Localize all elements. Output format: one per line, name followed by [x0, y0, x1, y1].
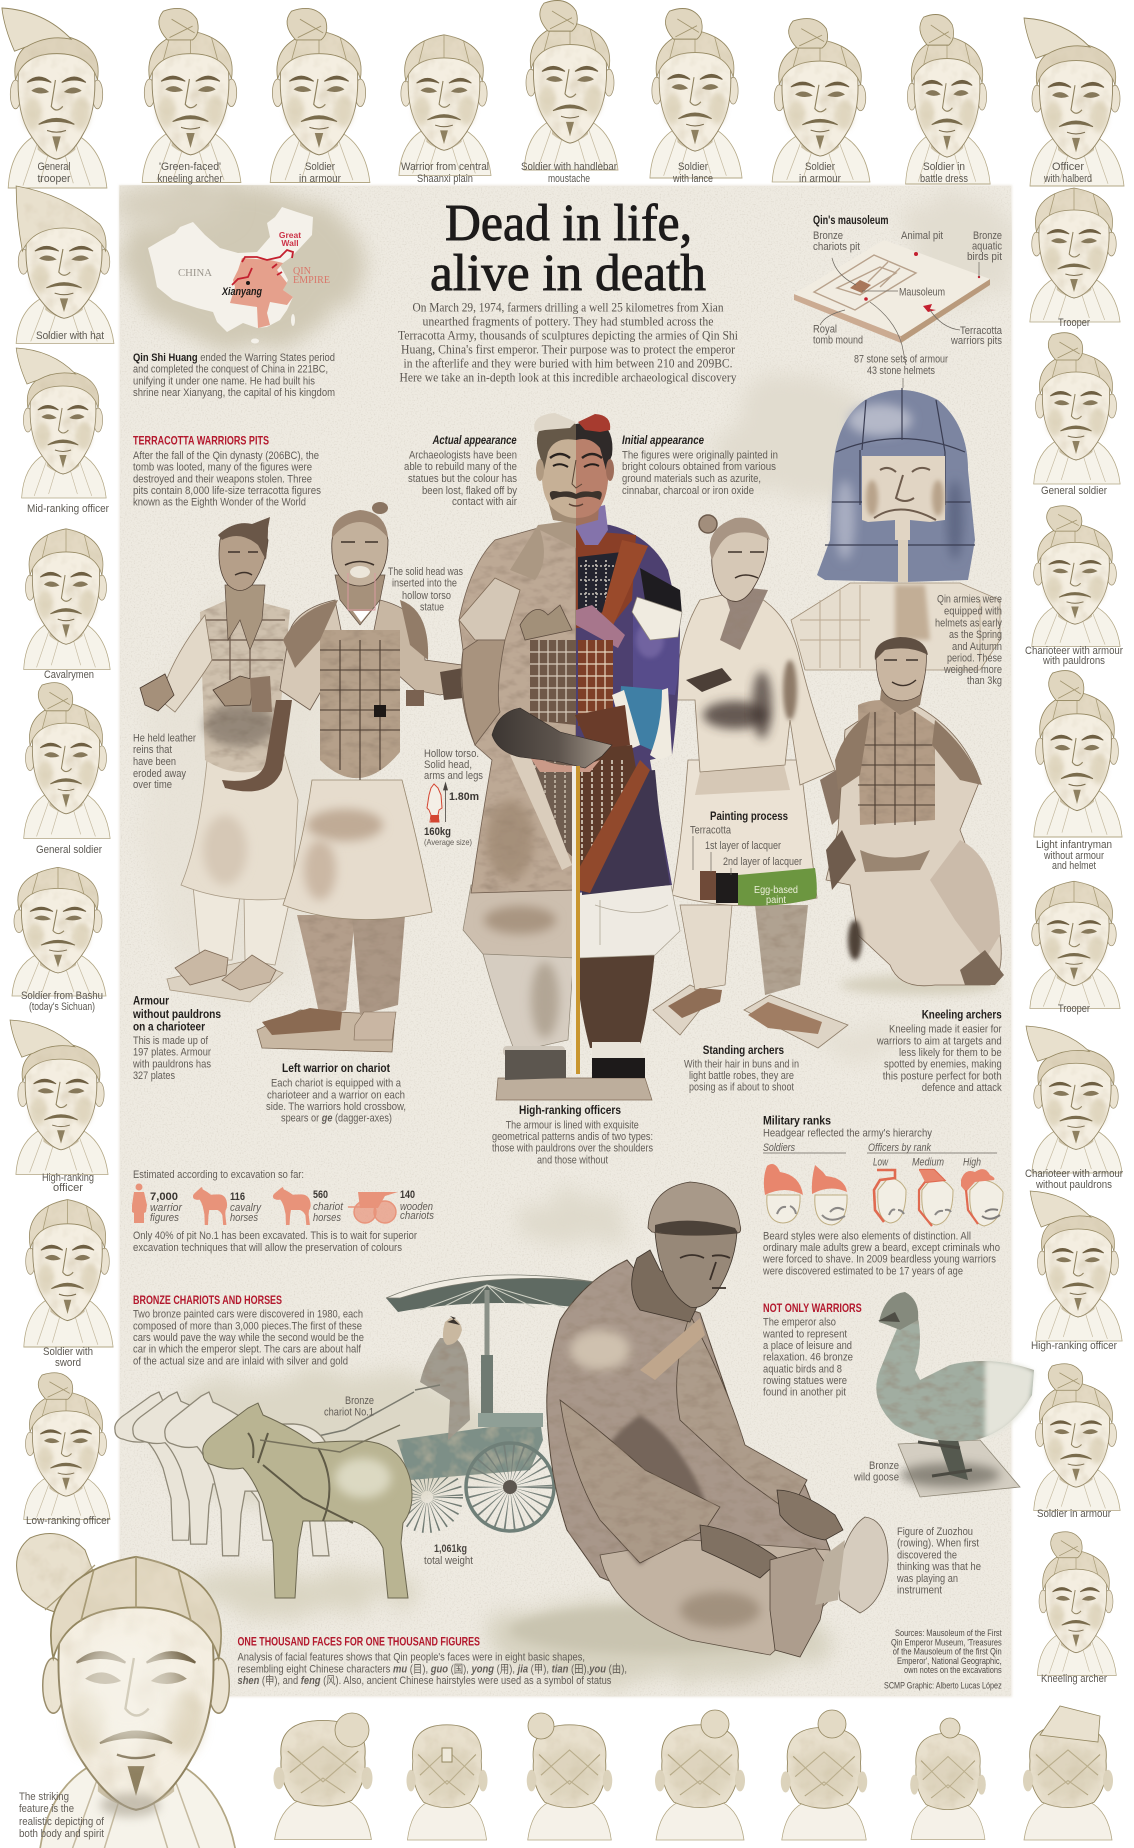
label: leather reins: [133, 732, 196, 791]
label: Qin armies helmets: weighed more: [943, 664, 1002, 676]
label: hollow torso with height icon: (Average size): [424, 837, 472, 847]
icon: soldier headgear 1: [764, 1164, 803, 1223]
icon: head General trooper: General: [38, 161, 70, 173]
title: Dead in life,: [445, 195, 692, 252]
intro paragraph: Here we take an in-depth look at this incredible archaeological discovery: [400, 370, 737, 385]
text: left warrior on chariot: Each chariot is equipped with a: [271, 1078, 402, 1090]
intro paragraph: [398, 299, 738, 385]
icon: head Soldier in battle dress: [906, 15, 990, 185]
chart: excavation estimates: [132, 1169, 434, 1254]
intro paragraph: Huang, China's first emperor. Their purpose was to protect the emperor: [401, 341, 736, 356]
label: figure of Zuozhou: thinking was that he: [897, 1561, 981, 1573]
text: kneeling archers: this posture perfect for both: [883, 1070, 1002, 1082]
text: standing archers: With their hair in buns and in: [684, 1058, 799, 1070]
painting process swatches: [700, 868, 817, 906]
text: sources and credit: of the Mausoleum of the first Qin: [893, 1646, 1002, 1656]
text: kneeling archers: spotted by enemies, making: [884, 1059, 1002, 1071]
icon: head Charioteer with armour with pauldrons: [1025, 506, 1123, 667]
text: one thousand faces: ONE THOUSAND FACES FOR ONE THOUSAND FIGURES: [238, 1637, 480, 1649]
icon: head Soldier with sword: sword: [55, 1357, 81, 1369]
chart: excavation estimates: Only 40% of pit No.1 has been excavated. This is to wait for superior: [133, 1230, 417, 1242]
icon: officer headgear high: [961, 1169, 1003, 1226]
icon: head Soldier in battle dress: battle dress: [920, 173, 968, 185]
panel: military ranks: [762, 1115, 1003, 1277]
diagram: Qin's mausoleum: aquatic: [972, 241, 1002, 253]
label: Qin armies helmets: equipped with: [944, 606, 1002, 618]
label: total weight: total weight: [424, 1555, 473, 1567]
icon: head Soldier in armour: in armour: [299, 173, 341, 185]
icon: head Charioteer with armour without pauldrons: without pauldrons: [1035, 1179, 1112, 1191]
text: high-ranking officers: [492, 1105, 653, 1166]
text: sources and credit: [884, 1628, 1002, 1690]
icon: head Green-faced kneeling archer: 'Green-faced': [159, 161, 221, 173]
map of China and Qin empire: Xianyang: [221, 286, 262, 298]
caption: striking feature: [19, 1791, 105, 1840]
text: not only warriors: a place of leisure and: [763, 1340, 852, 1352]
icon: head Green-faced kneeling archer: [142, 8, 241, 185]
icon: head Trooper: Trooper: [1058, 317, 1090, 329]
diagram: Qin's mausoleum: tomb mound: [813, 334, 863, 346]
icon: head High-ranking officer: [10, 1020, 108, 1194]
painting process labels: Terracotta: [690, 824, 732, 836]
main horse: [203, 1403, 412, 1598]
icon: head Officer with halberd: Officer: [1052, 161, 1084, 173]
figure: central high-ranking officer half restored: [459, 413, 682, 1100]
icons: rear heads showing hairstyles: [274, 1706, 1113, 1840]
map of China and Qin empire: [148, 207, 330, 344]
icon: head High-ranking officer right: High-ranking officer: [1031, 1340, 1117, 1352]
text: one thousand faces: shen (申), and feng (风). Also, ancient Chinese hairstyles were used as a symbol of status: [238, 1674, 612, 1687]
text: armour without pauldrons: 327 plates: [133, 1070, 175, 1082]
label: leather reins: reins that: [133, 744, 172, 756]
icon: head Soldier in armour 2: [772, 19, 870, 185]
icon: head Low-ranking officer: Low-ranking officer: [26, 1515, 110, 1527]
chart: excavation estimates: excavation techniques that will allow the preservation of colours: [133, 1242, 402, 1254]
label: stone sets: [854, 354, 948, 377]
label: actual appearance: able to rebuild many of the: [404, 461, 517, 473]
icon: head Soldier with handlebar moustache: Soldier with handlebar: [521, 161, 617, 173]
label: leather reins: have been: [133, 756, 176, 768]
text: armour without pauldrons: [132, 996, 221, 1082]
chart: excavation estimates: 116: [230, 1191, 245, 1203]
label: actual appearance: Actual appearance: [432, 435, 517, 447]
text: terracotta warriors pits: After the fall of the Qin dynasty (206BC), the: [133, 450, 319, 462]
text: terracotta warriors pits: TERRACOTTA WARRIORS PITS: [133, 436, 269, 448]
icon: head Soldier from Bashu: (today's Sichuan): [29, 1001, 95, 1013]
icon: cavalry horse: [193, 1187, 227, 1225]
text: not only warriors: The emperor also: [763, 1317, 836, 1329]
icon: head Kneeling archer: Kneeling archer: [1041, 1673, 1107, 1685]
map of China and Qin empire: Great: [279, 230, 301, 240]
text: kneeling archers: defence and attack: [922, 1082, 1002, 1094]
icon: head Charioteer with armour without pauldrons: [1025, 1026, 1123, 1191]
label: solid head: The solid head was: [388, 566, 463, 578]
diagram: Qin's mausoleum: Terracotta: [960, 325, 1003, 337]
icon: head Soldier in battle dress: Soldier in: [923, 161, 965, 173]
intro paragraph: On March 29, 1974, farmers drilling a well 25 kilometres from Xian: [412, 299, 724, 314]
icon: head General soldier: General soldier: [36, 844, 102, 856]
icon: head General soldier right: [1034, 333, 1120, 497]
diagram: Qin's mausoleum: chariots pit: [813, 241, 860, 253]
label: Qin armies helmets: [935, 594, 1002, 687]
icon: head Warrior from central Shaanxi plain: Warrior from central: [401, 161, 489, 173]
label: Qin armies helmets: period. These: [947, 653, 1002, 665]
icon: officer headgear low: [874, 1170, 906, 1223]
icon: head Officer with halberd: [1024, 18, 1124, 186]
text: Qin Shi Huang intro: unifying it under one name. He had built his: [133, 375, 315, 387]
text: terracotta warriors pits: known as the Eighth Wonder of the World: [133, 497, 306, 509]
figure: bronze chariot with canopy and horses: [115, 1275, 600, 1598]
caption: striking feature: feature is the: [19, 1803, 74, 1815]
icon: head High-ranking officer: officer: [53, 1182, 83, 1194]
chart: excavation estimates: figures: [150, 1212, 179, 1224]
label: leather reins: He held leather: [133, 732, 196, 744]
panel: military ranks: Officers by rank: [868, 1142, 931, 1154]
text: sources and credit: own notes on the excavations: [904, 1665, 1002, 1675]
text: terracotta warriors pits: [133, 436, 321, 509]
panel: military ranks: Low: [873, 1157, 889, 1169]
label: Qin armies helmets: helmets as early: [935, 617, 1002, 629]
icon: head Warrior from central Shaanxi plain: Shaanxi plain: [417, 173, 473, 185]
figure: Zuozhou rowing statue: [510, 1182, 981, 1657]
intro paragraph: Terracotta Army, thousands of sculptures depicting the armies of Qin Shi: [398, 327, 738, 342]
label: initial appearance: Initial appearance: [622, 435, 705, 447]
text: armour without pauldrons: with pauldrons has: [132, 1058, 211, 1070]
icon: head Light infantryman: [1034, 671, 1122, 872]
text: high-ranking officers: High-ranking officers: [519, 1105, 621, 1117]
label: total weight: 1,061kg: [434, 1543, 467, 1555]
icon: officer headgear medium: [919, 1170, 953, 1226]
text: bronze chariots and horses: composed of more than 3,000 pieces.The first of these: [133, 1320, 362, 1332]
diagram: Qin's mausoleum: Royal: [813, 324, 837, 336]
label: solid head: statue: [420, 602, 444, 614]
icon: head Mid-ranking officer: Mid-ranking officer: [27, 503, 109, 515]
label: total weight: [424, 1543, 473, 1567]
text: standing archers: light battle robes, they are: [689, 1070, 794, 1082]
text: sources and credit: Qin Emperor Museum, 'Treasures: [891, 1638, 1002, 1648]
icon: head Charioteer with armour with pauldrons: with pauldrons: [1042, 655, 1105, 667]
label: Qin armies helmets: Qin armies were: [937, 594, 1002, 606]
icon: head Soldier with lance: with lance: [672, 173, 713, 185]
painting process labels: [690, 811, 802, 875]
label: solid head: hollow torso: [402, 590, 451, 602]
text: armour without pauldrons: Armour: [133, 996, 169, 1008]
icon: head Trooper 2: Trooper: [1058, 1003, 1090, 1015]
figure: bronze wild goose: [853, 1292, 1034, 1497]
label: bronze wild goose: wild goose: [853, 1472, 899, 1484]
label: initial appearance: The figures were originally painted in: [622, 450, 778, 462]
icon: head High-ranking officer right: [1030, 1191, 1122, 1352]
intro paragraph: unearthed fragments of pottery. They had stumbled across the: [422, 313, 714, 328]
icon: head Cavalrymen: [24, 529, 110, 681]
icon: head Kneeling archer: [1037, 1532, 1116, 1685]
text: high-ranking officers: The armour is lined with exquisite: [506, 1119, 639, 1131]
text: standing archers: posing as if about to shoot: [689, 1082, 794, 1094]
chart: excavation estimates: chariot: [313, 1201, 344, 1213]
diagram: Qin's mausoleum: Mausoleum: [899, 287, 945, 299]
label: bronze wild goose: [853, 1460, 899, 1484]
text: kneeling archers: less likely for them to be: [899, 1047, 1002, 1059]
label: figure of Zuozhou: discovered the: [897, 1549, 957, 1561]
label: bronze chariot: Bronze: [345, 1395, 374, 1407]
label: solid head: [388, 566, 463, 614]
label: Qin armies helmets: as the Spring: [949, 629, 1002, 641]
label: actual appearance: been lost, flaked off by: [422, 485, 517, 497]
text: one thousand faces: Analysis of facial features shows that Qin people's faces were in eight basic shapes,: [238, 1652, 585, 1664]
icon: head Soldier with hat: [16, 186, 114, 344]
label: solid head: inserted into the: [392, 578, 457, 590]
text: left warrior on chariot: side. The warriors hold crossbow,: [266, 1101, 406, 1113]
text: one thousand faces: [238, 1637, 627, 1687]
text: Qin Shi Huang intro: Qin Shi Huang ended the Warring States period: [133, 352, 335, 364]
diagram: Qin's mausoleum: [794, 215, 1003, 388]
icon: head General soldier right: General soldier: [1041, 485, 1107, 497]
text: not only warriors: aquatic birds and 8: [763, 1363, 842, 1375]
chariot driver: [300, 1316, 470, 1440]
label: initial appearance: bright colours obtained from various: [622, 461, 776, 473]
label: figure of Zuozhou: was playing an: [896, 1573, 958, 1585]
figure: standing archer: [653, 515, 855, 1048]
chart: excavation estimates: chariots: [400, 1210, 434, 1222]
text: not only warriors: relaxation. 46 bronze: [763, 1352, 853, 1364]
panel: paper background: [110, 183, 1015, 1697]
panel: military ranks: Beard styles were also elements of distinction. All: [763, 1230, 971, 1242]
text: terracotta warriors pits: tomb was looted, many of the figures were: [133, 462, 312, 474]
icon: head Soldier with handlebar moustache: [521, 1, 618, 185]
text: not only warriors: found in another pit: [763, 1387, 846, 1399]
icon: head Soldier in armour right: [1034, 1364, 1120, 1520]
title: alive in death: [430, 245, 706, 302]
icon: head Soldier in armour: Soldier: [305, 161, 335, 173]
diagram: Qin's mausoleum: Bronze: [813, 230, 843, 242]
icon: head Soldier with lance: [650, 9, 742, 185]
map of China and Qin empire: EMPIRE: [293, 275, 330, 286]
diagram: Qin's mausoleum: Bronze: [973, 230, 1002, 242]
icon: head General trooper: [2, 8, 107, 188]
label: bronze chariot: [324, 1395, 374, 1418]
figure: stone helmet and armour bust: [791, 354, 1000, 670]
label: bronze wild goose: Bronze: [869, 1460, 899, 1472]
text: armour without pauldrons: on a charioteer: [133, 1022, 205, 1034]
panel: military ranks: Soldiers: [763, 1142, 795, 1154]
label: hollow torso with height icon: 1.80m: [449, 791, 479, 803]
figure: kneeling archer: [826, 637, 1004, 995]
icon: head Soldier with lance: Soldier: [678, 161, 708, 173]
chart: excavation estimates: 7,000: [150, 1191, 178, 1203]
text: terracotta warriors pits: pits contain 8,000 life-size terracotta figures: [133, 485, 321, 497]
text: bronze chariots and horses: Two bronze painted cars were discovered in 1980, each: [133, 1309, 363, 1321]
panel: military ranks: Military ranks: [763, 1115, 831, 1127]
text: high-ranking officers: geometrical patterns andis of two types:: [492, 1131, 653, 1143]
icon: head Green-faced kneeling archer: kneeling archer: [158, 173, 223, 185]
label: initial appearance: [622, 435, 778, 497]
text: armour without pauldrons: 197 plates. Armour: [133, 1047, 211, 1059]
icon: head Soldier in armour 2: Soldier: [805, 161, 835, 173]
label: hollow torso with height icon: 160kg: [424, 826, 451, 838]
icon: head General soldier: [24, 683, 110, 856]
text: one thousand faces: resembling eight Chinese characters mu (目), guo (国), yong (用), jia (甲), tian (田),you (由),: [238, 1661, 627, 1675]
text: not only warriors: [762, 1303, 862, 1399]
icon: head Warrior from central Shaanxi plain: [399, 35, 491, 185]
text: kneeling archers: [876, 1009, 1002, 1094]
text: high-ranking officers: and those without: [537, 1154, 608, 1166]
map of China and Qin empire: QIN: [293, 266, 311, 277]
chart: excavation estimates: horses: [230, 1212, 258, 1224]
pale rear horses: [115, 1392, 332, 1556]
text: sources and credit: SCMP Graphic: Alberto Lucas López: [884, 1680, 1002, 1690]
painting process swatches: paint: [766, 895, 786, 906]
diagram: Qin's mausoleum: Animal pit: [901, 230, 943, 242]
text: sources and credit: Emperor', National Geographic,: [897, 1656, 1002, 1666]
map of China and Qin empire: Wall: [281, 238, 299, 248]
painting process labels: Painting process: [710, 811, 788, 823]
label: hollow torso with height icon: Solid head,: [424, 759, 472, 771]
icon: head Soldier from Bashu: Soldier from Bashu: [21, 990, 103, 1002]
icon: head Soldier in armour: [270, 8, 370, 185]
icon: head Light infantryman: without armour: [1043, 850, 1104, 862]
chariot car and wheels: [397, 1413, 554, 1531]
label: hollow torso with height icon: Hollow torso.: [424, 748, 479, 760]
icon: head Light infantryman: and helmet: [1052, 860, 1096, 872]
panel: military ranks: were discovered estimated to be 17 years of age: [762, 1265, 963, 1277]
text: left warrior on chariot: spears or ge (dagger-axes): [281, 1113, 392, 1125]
label: figure of Zuozhou: [896, 1526, 981, 1597]
text: kneeling archers: Kneeling made it easier for: [889, 1024, 1002, 1036]
diagram: Qin's mausoleum: warriors pits: [950, 335, 1002, 347]
label: figure of Zuozhou: Figure of Zuozhou: [897, 1526, 973, 1538]
label: hollow torso with height icon: arms and legs: [424, 770, 483, 782]
label: actual appearance: statues but the colour has: [408, 473, 517, 485]
text: terracotta warriors pits: destroyed and their weapons stolen. Three: [133, 473, 312, 485]
text: left warrior on chariot: [266, 1063, 406, 1125]
text: bronze chariots and horses: [133, 1295, 364, 1367]
painting process labels: 1st layer of lacquer: [705, 840, 781, 852]
diagram: Qin's mausoleum: birds pit: [967, 251, 1002, 263]
label: figure of Zuozhou: (rowing). When first: [897, 1538, 979, 1550]
text: kneeling archers: warriors to aim at targets and: [876, 1035, 1002, 1047]
label: hollow torso with height icon: [424, 748, 483, 847]
icon: head Mid-ranking officer: [16, 348, 109, 515]
icon: chariot horse: [273, 1187, 311, 1225]
icon: head Officer with halberd: with halberd: [1043, 173, 1092, 185]
caption: striking feature: realistic depicting of: [19, 1816, 105, 1828]
label: actual appearance: Archaeologists have been: [409, 450, 517, 462]
chart: excavation estimates: cavalry: [230, 1202, 262, 1214]
panel: military ranks: High: [963, 1157, 981, 1169]
title: [430, 195, 706, 302]
chart: excavation estimates: Estimated according to excavation so far:: [133, 1169, 304, 1181]
text: kneeling archers: Kneeling archers: [922, 1009, 1002, 1021]
text: not only warriors: wanted to represent: [762, 1328, 847, 1340]
icon: warrior figures: [132, 1184, 147, 1223]
panel: military ranks: were forced to shave. In 2009 beardless young warriors: [762, 1254, 996, 1266]
text: bronze chariots and horses: of the actual size and are inlaid with silver and gold: [133, 1355, 348, 1367]
icon: large realistic head: [17, 1534, 238, 1848]
map of China and Qin empire: CHINA: [178, 267, 212, 279]
label: bronze chariot: chariot No.1: [324, 1406, 374, 1418]
icon: head Light infantryman: Light infantryman: [1036, 839, 1112, 851]
icon: head Soldier with sword: [24, 1200, 113, 1369]
text: standing archers: [684, 1045, 799, 1094]
icon: wooden chariot: [348, 1192, 398, 1223]
icon: head High-ranking officer: High-ranking: [42, 1172, 94, 1184]
text: high-ranking officers: those with pauldrons over the shoulders: [492, 1143, 653, 1155]
label: figure of Zuozhou: instrument: [897, 1585, 942, 1597]
icon: head Soldier with hat: Soldier with hat: [36, 330, 104, 342]
label: leather reins: eroded away: [133, 768, 186, 780]
label: Qin armies helmets: than 3kg: [967, 675, 1002, 687]
chariot canopy: [386, 1275, 600, 1415]
text: bronze chariots and horses: car in which the emperor slept. The cars are about half: [133, 1344, 362, 1356]
icon: head Cavalrymen: Cavalrymen: [44, 669, 94, 681]
icon: head Soldier with sword: Soldier with: [43, 1346, 93, 1358]
chart: excavation estimates: warrior: [150, 1202, 183, 1214]
figure: left warrior on chariot: [222, 502, 463, 1052]
icon: head General trooper: trooper: [38, 173, 71, 185]
chart: excavation estimates: 140: [400, 1189, 415, 1201]
icon: head Charioteer with armour without pauldrons: Charioteer with armour: [1025, 1168, 1123, 1180]
icon: head Soldier in armour right: Soldier in armour: [1037, 1508, 1111, 1520]
text: not only warriors: NOT ONLY WARRIORS: [763, 1303, 862, 1315]
caption: striking feature: both body and spirit: [19, 1828, 104, 1840]
chart: excavation estimates: 560: [313, 1189, 328, 1201]
text: standing archers: Standing archers: [703, 1045, 784, 1057]
icon: soldier headgear 2: [812, 1165, 847, 1225]
icon: head Trooper 2: [1030, 881, 1120, 1015]
text: Qin Shi Huang intro: [133, 352, 335, 399]
label: Qin armies helmets: and Autumn: [952, 641, 1002, 653]
painting process labels: 2nd layer of lacquer: [723, 856, 802, 868]
icon: head Soldier from Bashu: [12, 867, 106, 1013]
figure: charioteer armour without pauldrons: [140, 517, 298, 1002]
icon: head Low-ranking officer: [24, 1373, 110, 1527]
label: initial appearance: ground materials such as azurite,: [622, 473, 761, 485]
caption: striking feature: The striking: [19, 1791, 69, 1803]
icon: head Soldier in armour 2: in armour: [799, 173, 841, 185]
text: Qin Shi Huang intro: and completed the conquest of China in 221BC,: [133, 364, 328, 376]
label: actual appearance: [404, 435, 517, 508]
label: leather reins: over time: [133, 779, 172, 791]
icon: head Charioteer with armour with pauldrons: Charioteer with armour: [1025, 645, 1123, 657]
label: actual appearance: contact with air: [452, 496, 517, 508]
label: stone sets: 43 stone helmets: [867, 365, 935, 377]
label: initial appearance: cinnabar, charcoal or iron oxide: [622, 485, 754, 497]
icon: head Trooper: [1030, 188, 1120, 329]
text: bronze chariots and horses: BRONZE CHARIOTS AND HORSES: [133, 1295, 282, 1307]
panel: military ranks: Headgear reflected the army's hierarchy: [763, 1128, 932, 1140]
label: stone sets: 87 stone sets of armour: [854, 354, 948, 366]
text: not only warriors: rowing statues were: [763, 1375, 847, 1387]
text: sources and credit: Sources: Mausoleum of the First: [895, 1628, 1002, 1638]
painting process swatches: Egg-based: [754, 885, 798, 896]
text: bronze chariots and horses: cars would pave the way while the second would be the: [133, 1332, 364, 1344]
panel: military ranks: ordinary male adults grew a beard, except criminals who: [763, 1242, 1000, 1254]
text: left warrior on chariot: charioteer and a warrior on each: [267, 1089, 405, 1101]
icon: head Soldier with handlebar moustache: moustache: [548, 173, 590, 185]
text: armour without pauldrons: without pauldrons: [132, 1009, 221, 1021]
text: armour without pauldrons: This is made up of: [133, 1035, 209, 1047]
chart: excavation estimates: wooden: [400, 1201, 433, 1213]
intro paragraph: in the afterlife and they were buried with him between 210 and 209BC.: [404, 355, 732, 370]
chart: excavation estimates: horses: [313, 1212, 341, 1224]
panel: military ranks: Medium: [912, 1157, 944, 1169]
diagram: Qin's mausoleum: Qin's mausoleum: [813, 215, 888, 227]
text: Qin Shi Huang intro: shrine near Xianyang, the capital of his kingdom: [133, 387, 335, 399]
text: left warrior on chariot: Left warrior on chariot: [282, 1063, 390, 1075]
